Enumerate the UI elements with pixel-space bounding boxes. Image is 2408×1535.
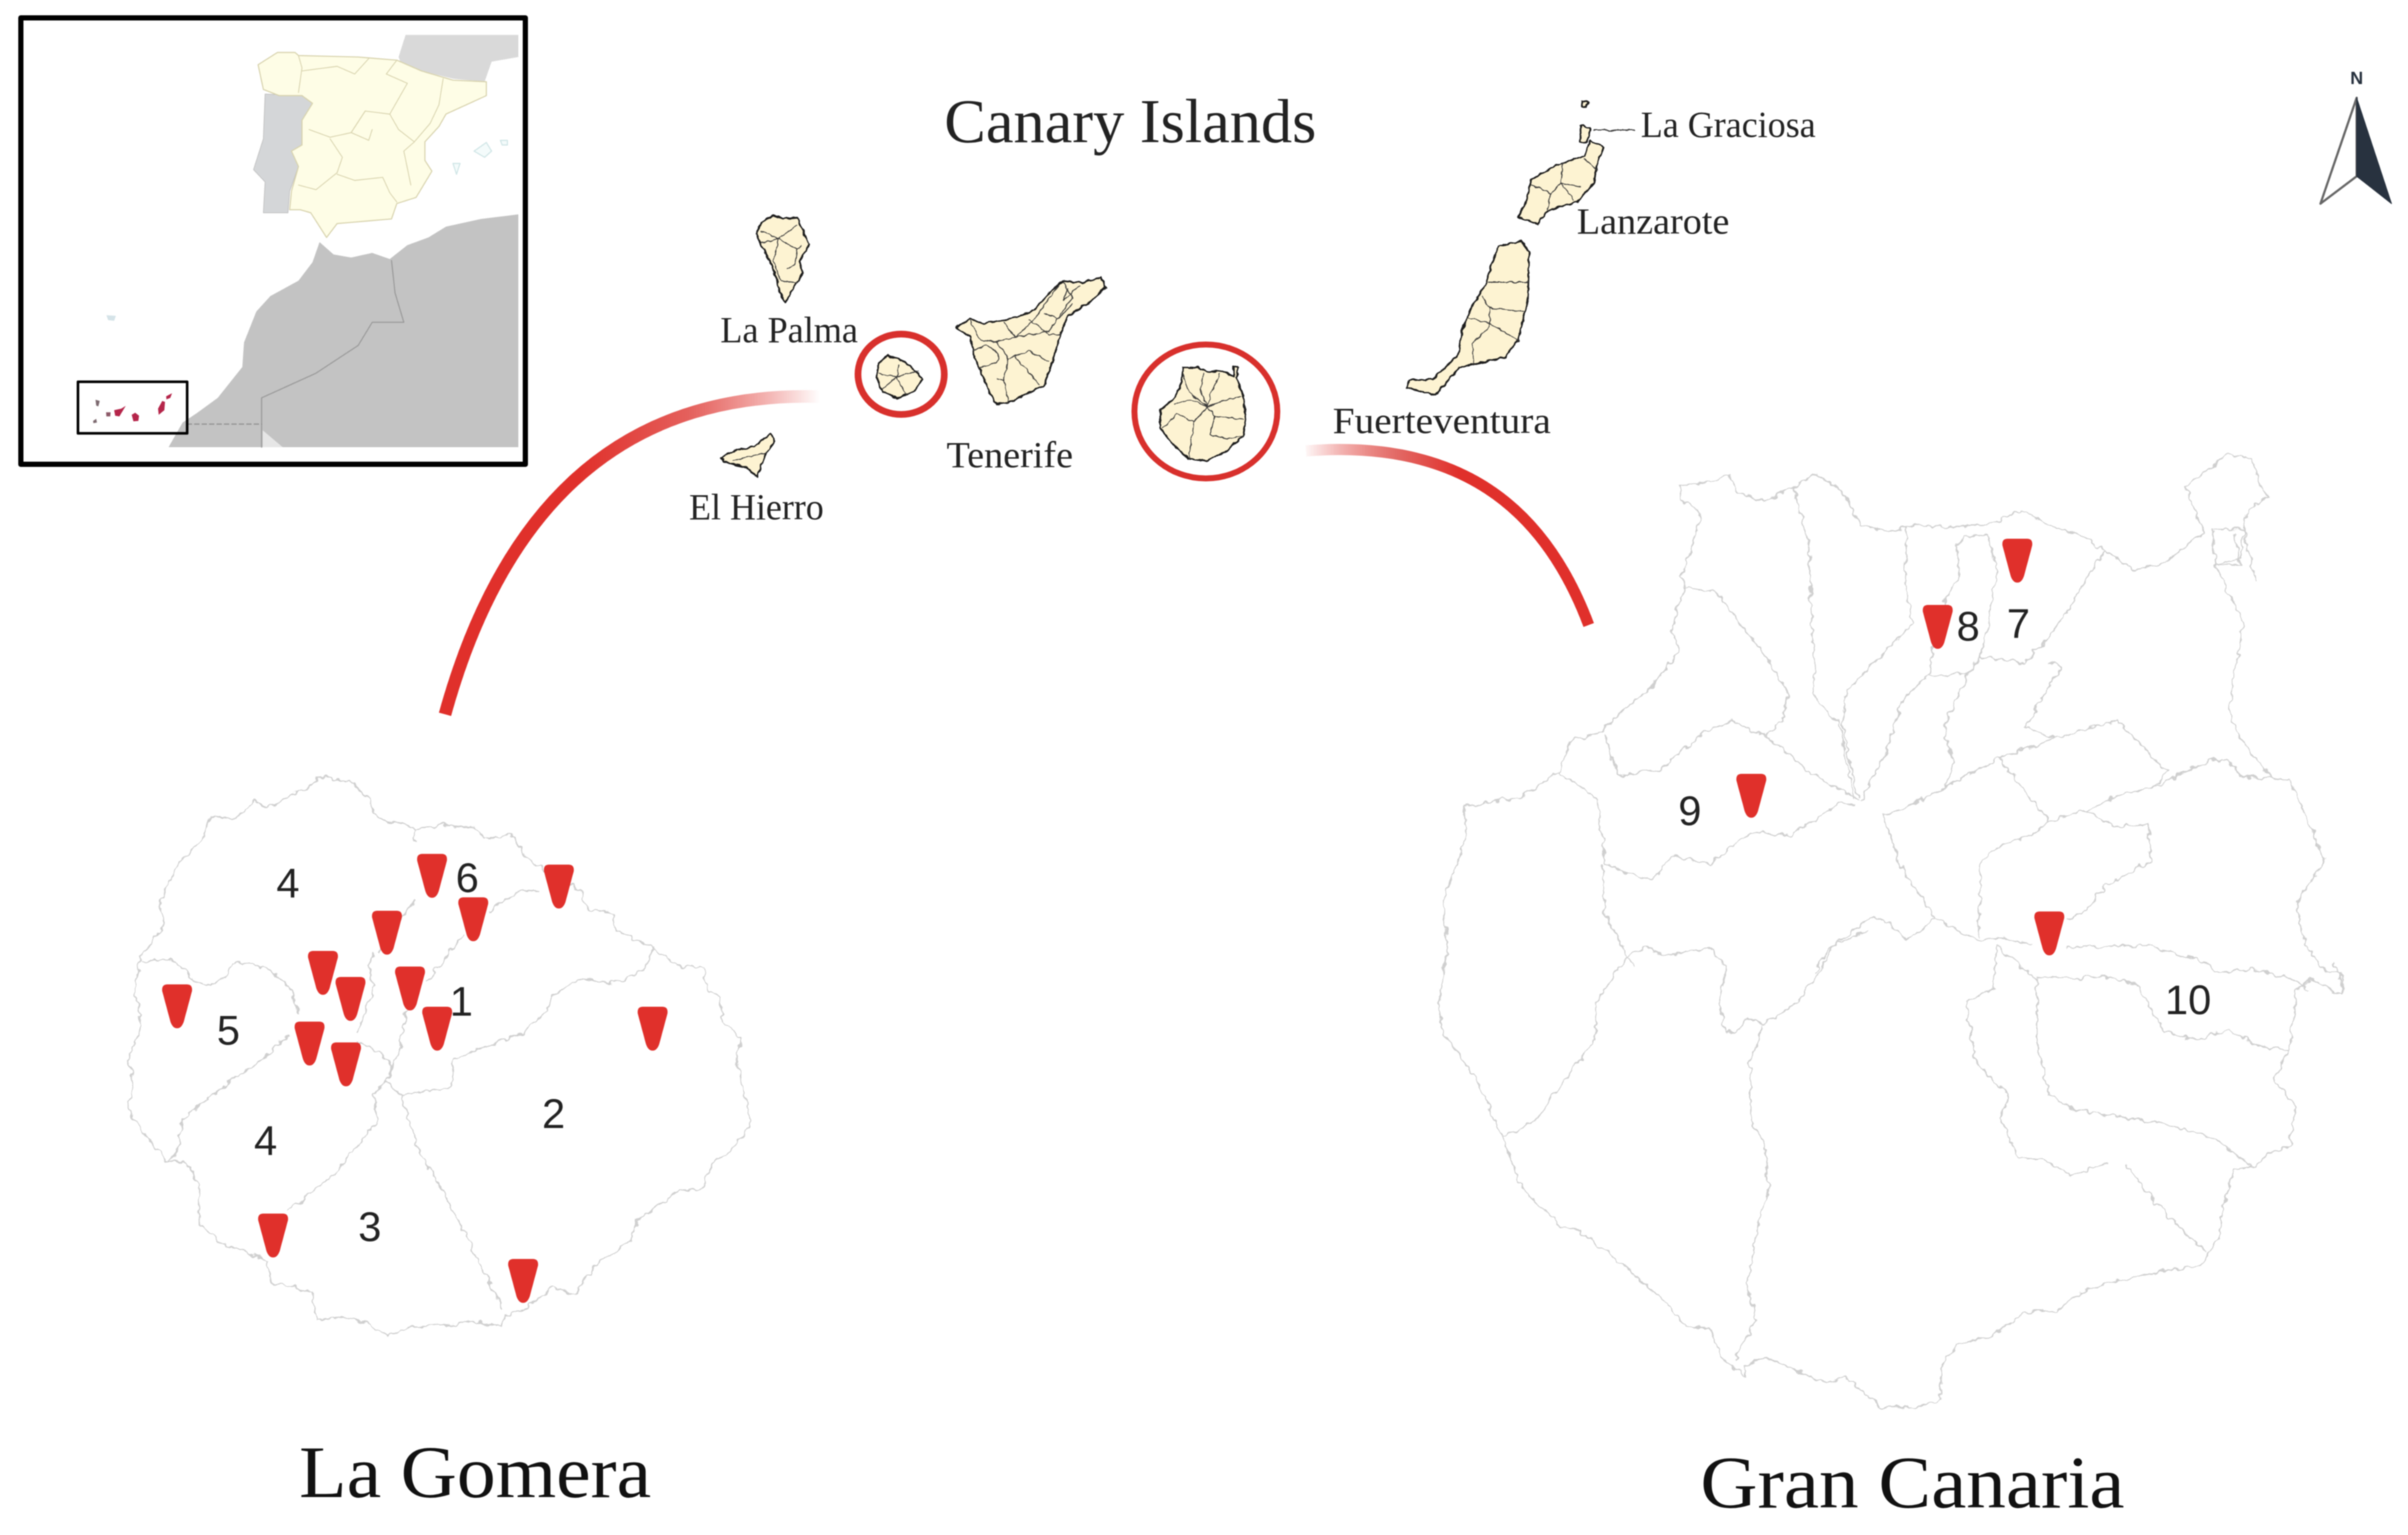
inset frame	[21, 18, 525, 464]
panel: locator map of Iberia and north-west Africa	[21, 18, 525, 464]
heading: La Gomera: La Gomera	[299, 1431, 651, 1513]
numbers: La Gomera municipalities: 4	[254, 1117, 278, 1164]
highlight circle: Gran Canaria	[1134, 345, 1277, 478]
heading: Gran Canaria: Gran Canaria	[1700, 1441, 2124, 1524]
island: La Palma	[756, 215, 809, 302]
label: La Palma: La Palma	[720, 309, 858, 350]
island: La Graciosa	[1581, 101, 1634, 142]
island: Tenerife	[956, 277, 1106, 404]
island: Gran Canaria small	[1160, 366, 1246, 461]
locator box around the Canary Islands	[78, 382, 188, 433]
label: Fuerteventura: Fuerteventura	[1333, 400, 1551, 441]
map: La Gomera municipalities	[129, 777, 750, 1336]
numbers: Gran Canaria municipalities: 9	[1678, 787, 1702, 834]
label: Lanzarote: Lanzarote	[1577, 200, 1729, 242]
north arrow	[2320, 68, 2392, 204]
archipelago: eastern islands	[1406, 101, 1634, 395]
numbers: Gran Canaria municipalities: 10	[2165, 976, 2212, 1023]
numbers: Gran Canaria municipalities: 7	[2007, 600, 2030, 647]
island: Fuerteventura	[1406, 241, 1529, 395]
highlight circle: La Gomera	[858, 334, 944, 414]
label: El Hierro: El Hierro	[689, 486, 824, 528]
map: Gran Canaria municipalities	[1438, 454, 2343, 1406]
numbers: Gran Canaria municipalities: 8	[1956, 603, 1980, 650]
title: Canary Islands: Canary Islands	[944, 87, 1316, 156]
label: La Graciosa: La Graciosa	[1641, 103, 1816, 145]
numbers: La Gomera municipalities: 4	[276, 859, 300, 906]
north arrow: N	[2350, 68, 2363, 89]
numbers: La Gomera municipalities: 3	[358, 1203, 382, 1250]
pins: Gran Canaria sites	[1736, 539, 2064, 955]
numbers: La Gomera municipalities: 6	[455, 854, 479, 901]
numbers: La Gomera municipalities: 1	[449, 978, 473, 1025]
numbers: La Gomera municipalities	[217, 854, 566, 1250]
numbers: La Gomera municipalities: 2	[542, 1090, 566, 1137]
pins: La Gomera sites	[162, 854, 667, 1303]
label: Tenerife: Tenerife	[947, 434, 1073, 475]
island: Lanzarote	[1518, 141, 1604, 224]
island: La Gomera small	[877, 356, 922, 398]
arrow: curve from archipelago to La Gomera	[445, 397, 820, 714]
arrow: curve from archipelago to Gran Canaria	[1306, 449, 1589, 625]
numbers: Gran Canaria municipalities	[1678, 600, 2212, 1023]
island: El Hierro	[721, 433, 775, 477]
archipelago: western islands	[721, 215, 1246, 477]
numbers: La Gomera municipalities: 5	[217, 1007, 240, 1054]
